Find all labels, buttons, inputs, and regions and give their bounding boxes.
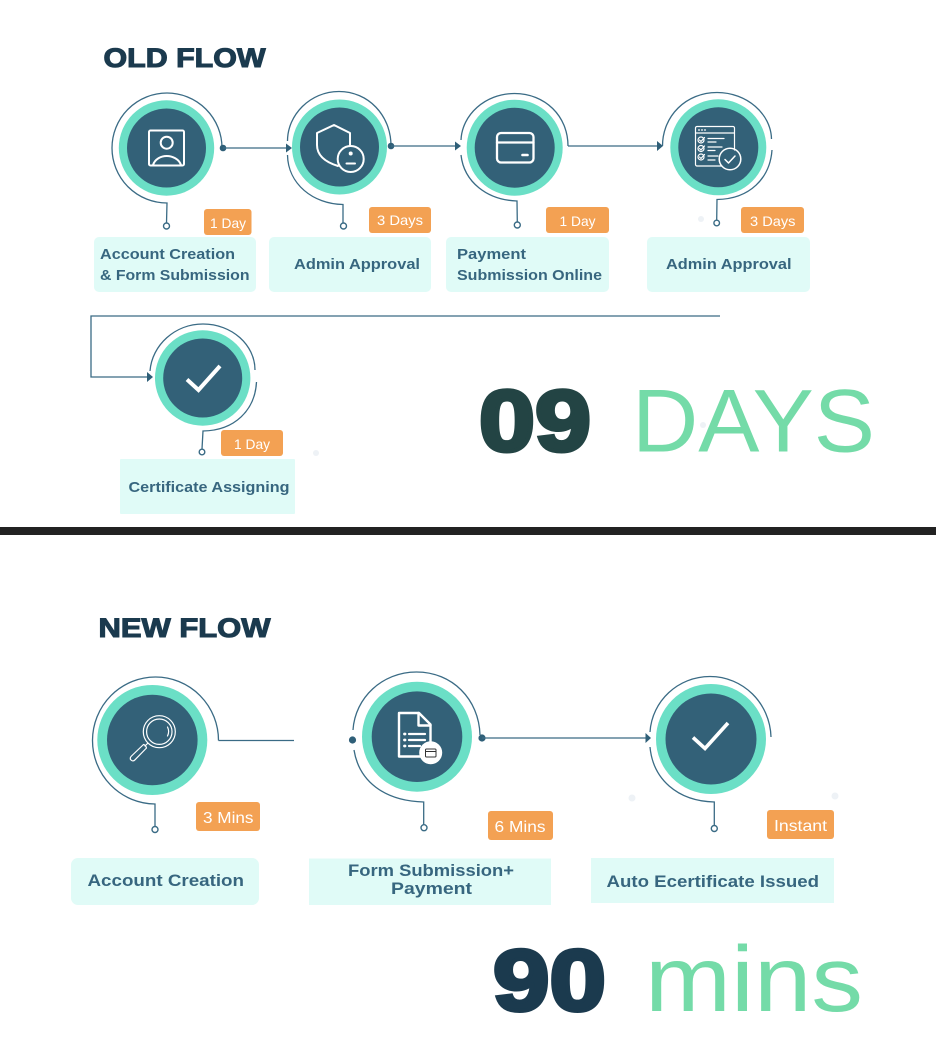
icon: check: [187, 366, 220, 390]
stat: 90 mins: mins: [645, 927, 863, 1031]
icon disc: [155, 330, 250, 426]
stat: 09 days: [479, 370, 875, 470]
badge: 6 mins: 6 Mins: [494, 819, 546, 836]
badge: 1 day: [546, 207, 609, 233]
icon: document with wallet: [399, 713, 442, 764]
arrow: new step 2 to 3: [478, 733, 651, 743]
step: account creation and form submission: [94, 93, 256, 292]
label: Account Creation: [88, 871, 244, 890]
label: Payment: [457, 246, 526, 263]
ring connector: [93, 677, 294, 827]
ring connector: [461, 94, 568, 222]
icon disc: [467, 100, 563, 196]
badge: 6 mins: [488, 811, 553, 840]
icon: check: [693, 723, 728, 748]
ring connector: [650, 676, 771, 826]
icon: magnifier: [130, 716, 175, 761]
badge: 1 day: 1 Day: [560, 213, 596, 229]
ring connector: [112, 93, 222, 223]
title: old flow: OLD FLOW: [104, 43, 266, 73]
icon: profile card: [149, 130, 184, 166]
ring connector: [353, 672, 480, 825]
icon: shield with person: [317, 125, 364, 172]
arrow: wrap to certificate step: [91, 316, 720, 382]
icon disc: [119, 100, 214, 196]
badge: 1 day: [221, 430, 283, 456]
icon disc: [97, 685, 207, 795]
badge: 3 mins: 3 Mins: [203, 810, 254, 827]
badge: 3 days: 3 Days: [750, 213, 796, 229]
label: [446, 237, 609, 292]
ring connector: [662, 92, 772, 220]
step: account creation: [71, 677, 294, 905]
step: certificate assigning: [120, 324, 295, 514]
label: Account Creation: [100, 246, 235, 263]
label: Auto Ecertificate Issued: [606, 872, 819, 891]
label: [120, 459, 295, 514]
step: form submission and payment: [309, 672, 553, 905]
badge: 3 days: [741, 207, 804, 233]
icon: credit card: [497, 133, 534, 162]
arrow: step 1 to 2: [220, 144, 292, 152]
badge: 3 days: [369, 207, 431, 233]
ring connector: [150, 324, 256, 449]
label: Form Submission+: [348, 861, 514, 880]
step: admin approval: [269, 92, 431, 292]
stat: 09 days: 09: [479, 374, 591, 470]
badge: 1 day: [204, 209, 252, 235]
icon disc: [670, 99, 766, 195]
badge: instant: [767, 810, 834, 839]
step: payment submission online: [446, 94, 609, 292]
label: Payment: [391, 879, 472, 898]
divider band: [0, 527, 936, 535]
stat: 09 days: DAYS: [632, 370, 875, 470]
label: Admin Approval: [294, 256, 420, 273]
icon disc: [656, 684, 766, 794]
label: [309, 858, 551, 905]
icon: checklist: [696, 126, 741, 170]
label: [591, 858, 834, 903]
label: Submission Online: [457, 267, 602, 284]
label: [71, 858, 259, 905]
arrow: step 2 to 3: [388, 142, 461, 150]
arrow: step 3 to 4: [568, 141, 663, 151]
badge: 1 day: 1 Day: [210, 215, 246, 231]
label: [647, 237, 810, 292]
icon disc: [362, 682, 472, 792]
label: [269, 237, 431, 292]
badge: 3 days: 3 Days: [377, 212, 423, 228]
badge: 3 mins: [196, 802, 260, 831]
badge: instant: Instant: [774, 818, 828, 835]
badge: 1 day: 1 Day: [234, 436, 270, 452]
label: & Form Submission: [100, 267, 250, 284]
icon disc: [292, 100, 387, 194]
stat: 90 mins: 90: [493, 933, 606, 1029]
title: new flow: NEW FLOW: [98, 613, 271, 643]
step: auto ecertificate issued: [591, 676, 834, 903]
label: Certificate Assigning: [128, 479, 290, 496]
label: Admin Approval: [666, 256, 792, 273]
stat: 90 mins: [493, 927, 863, 1031]
step: admin approval second: [647, 92, 810, 292]
label: [94, 237, 256, 292]
ring connector: [288, 92, 391, 223]
